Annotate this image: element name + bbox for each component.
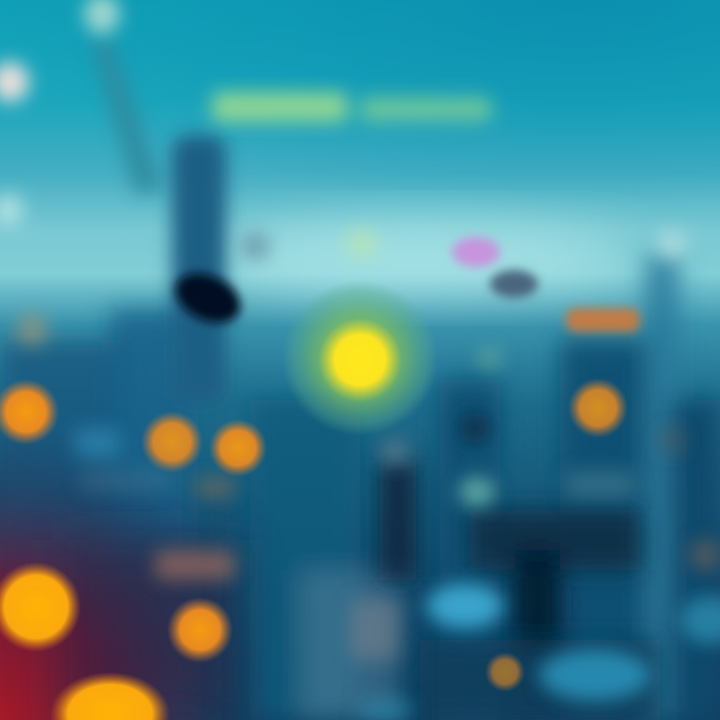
red glow lower left	[0, 420, 270, 720]
pale blob top right	[656, 230, 688, 258]
small teal accents	[379, 348, 720, 571]
orange label top right	[566, 308, 640, 332]
muted label bars	[75, 428, 635, 660]
green blurred heading	[212, 92, 492, 122]
skyline silhouettes	[0, 255, 720, 720]
tall tower with arm	[84, 0, 270, 405]
pink and dark icon	[452, 237, 538, 298]
white blobs left edge	[0, 62, 48, 346]
central yellow sun icon	[282, 229, 438, 436]
dark lower right buildings	[380, 460, 660, 720]
cyan pools lower right	[357, 584, 720, 720]
orange glowing circles	[0, 378, 628, 720]
